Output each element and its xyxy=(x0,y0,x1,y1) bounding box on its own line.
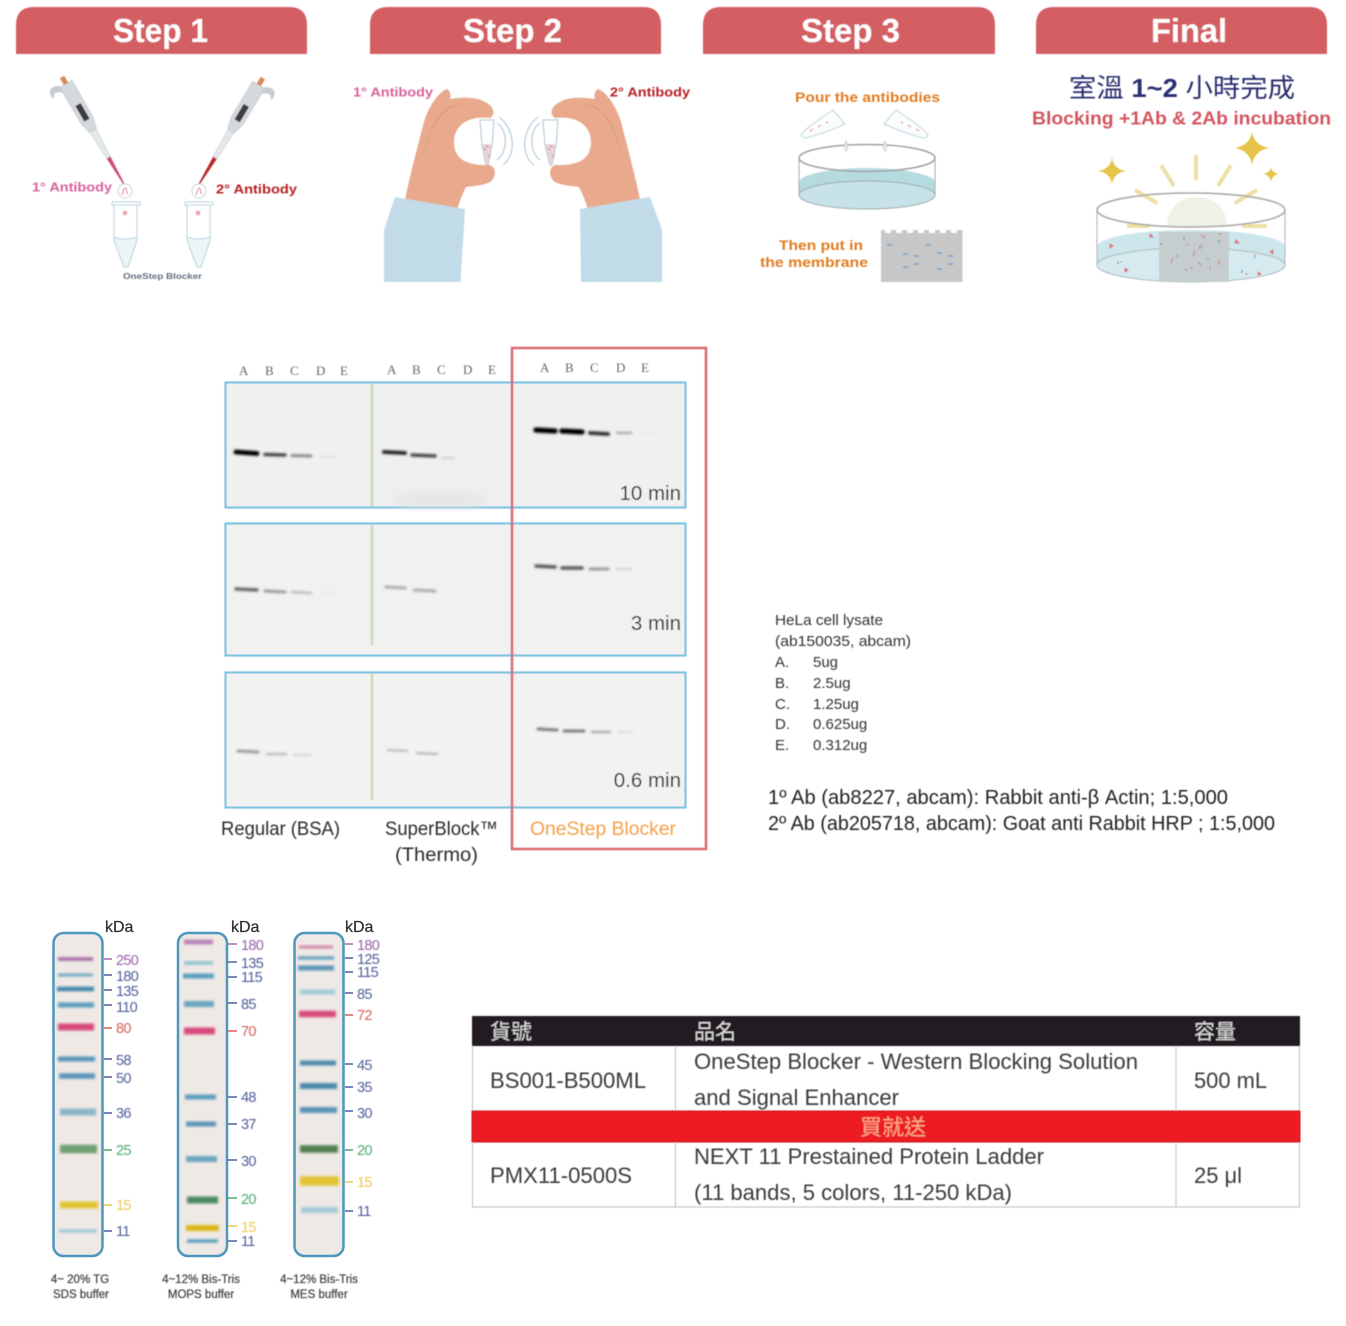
text: HeLa cell lysate samples: 0.625ug xyxy=(813,716,867,733)
table header: 品名 xyxy=(694,1021,736,1044)
icon: left hand xyxy=(384,89,495,282)
label: 1 antibody: 1° Antibody xyxy=(353,84,434,100)
table borders xyxy=(472,1046,1300,1207)
label: 2 antibody: 2° Antibody xyxy=(610,84,691,100)
marker ticks xyxy=(228,944,237,1241)
marker labels: 80 xyxy=(116,1021,131,1037)
panel: western blot comparison xyxy=(221,348,706,866)
marker labels: 180 xyxy=(116,969,139,985)
banner: buy and get free xyxy=(472,1111,1300,1142)
row: OneStep Blocker: and Signal Enhancer xyxy=(694,1085,899,1110)
icon: right hand xyxy=(550,89,662,282)
label: then put in the membrane: Then put in xyxy=(779,238,863,253)
table header: 容量 xyxy=(1194,1021,1236,1044)
table: product ordering xyxy=(472,1016,1300,1207)
lane letters: D xyxy=(616,360,625,375)
text: HeLa cell lysate samples: (ab150035, abcam) xyxy=(775,633,911,650)
marker ticks xyxy=(104,959,112,1231)
label: 3 min: 3 min xyxy=(631,612,681,635)
label: then put in the membrane xyxy=(760,238,869,270)
marker labels: 58 xyxy=(116,1053,131,1069)
text: HeLa cell lysate samples: B. xyxy=(775,675,789,692)
table header xyxy=(472,1016,1300,1046)
marker labels: 110 xyxy=(116,1000,138,1016)
marker labels: 115 xyxy=(357,965,379,981)
label: then put in the membrane: the membrane xyxy=(760,255,869,270)
ladder: 4-20% TG SDS buffer xyxy=(51,919,139,1301)
gel lane xyxy=(54,933,102,1256)
lane letters: C xyxy=(590,360,599,375)
caption xyxy=(162,1274,240,1301)
table header: 貨號 xyxy=(490,1021,532,1044)
label: SuperBlock Thermo: (Thermo) xyxy=(395,844,478,866)
panel: protein ladders xyxy=(51,919,380,1301)
lane letters: A xyxy=(239,363,249,378)
marker labels: 15 xyxy=(241,1220,256,1236)
lane letters: C xyxy=(290,363,299,378)
caption: 4~ 20% TG xyxy=(51,1274,109,1286)
marker labels: 85 xyxy=(357,987,372,1003)
icon: final dish with membrane xyxy=(1097,193,1285,282)
icon: petri dish with solution xyxy=(799,141,935,209)
marker labels: 37 xyxy=(241,1117,256,1133)
marker labels: 72 xyxy=(357,1008,372,1024)
marker labels: 250 xyxy=(116,953,139,969)
lane letters: E xyxy=(488,362,496,377)
row: NEXT 11 ladder: 25 μl xyxy=(1194,1163,1242,1188)
icon: shaken tubes xyxy=(480,117,558,165)
text: HeLa cell lysate samples: 2.5ug xyxy=(813,675,851,692)
heading: step 1 xyxy=(16,7,307,54)
label: 10 min: 10 min xyxy=(619,482,681,505)
caption: 4~12% Bis-Tris xyxy=(162,1274,240,1286)
bands xyxy=(183,942,219,1241)
text: HeLa cell lysate samples: E. xyxy=(775,737,789,754)
heading: step 2: Step 2 xyxy=(463,12,562,49)
marker labels: 30 xyxy=(241,1154,256,1170)
marker labels: 180 xyxy=(241,938,264,954)
unit kDa: kDa xyxy=(231,919,260,936)
bands xyxy=(298,947,339,1210)
heading: step 1: Step 1 xyxy=(113,12,208,49)
marker labels: 135 xyxy=(116,984,139,1000)
unit kDa: kDa xyxy=(345,919,374,936)
lane letters: B xyxy=(565,360,574,375)
text: HeLa cell lysate samples: 0.312ug xyxy=(813,737,867,754)
highlight frame: OneStep Blocker xyxy=(512,348,706,849)
icon: right pipette xyxy=(192,74,279,196)
label: OneStep Blocker: OneStep Blocker xyxy=(123,271,203,281)
lane letters: B xyxy=(265,363,274,378)
text: HeLa cell lysate samples: 5ug xyxy=(813,654,838,671)
label: SuperBlock Thermo: SuperBlock™ xyxy=(385,818,498,840)
caption: 4~12% Bis-Tris xyxy=(280,1274,358,1286)
panel: step 1 xyxy=(16,7,307,281)
caption: MES buffer xyxy=(290,1289,348,1301)
marker labels xyxy=(116,953,139,1240)
icon: pouring tubes xyxy=(801,110,928,138)
marker labels: 20 xyxy=(357,1143,372,1159)
unit kDa: kDa xyxy=(105,919,134,936)
marker labels xyxy=(241,938,264,1250)
icon: right tube xyxy=(185,202,213,267)
marker labels: 36 xyxy=(116,1106,131,1122)
icon: left pipette xyxy=(45,73,131,196)
label: Regular (BSA): Regular (BSA) xyxy=(221,818,340,840)
blot: 3 min xyxy=(226,524,686,656)
marker labels: 11 xyxy=(241,1234,255,1250)
text: HeLa cell lysate samples xyxy=(775,612,911,754)
marker labels: 85 xyxy=(241,997,256,1013)
icon: membrane xyxy=(881,230,962,282)
marker labels: 15 xyxy=(116,1198,131,1214)
heading: step 2 xyxy=(370,7,661,54)
gel lane xyxy=(178,933,227,1256)
label: 0.6 min: 0.6 min xyxy=(614,769,681,792)
row: NEXT 11 ladder xyxy=(490,1144,1242,1205)
heading: step 3: Step 3 xyxy=(801,12,900,49)
label: OneStep Blocker: OneStep Blocker xyxy=(530,818,676,840)
marker labels: 35 xyxy=(357,1080,372,1096)
marker labels: 15 xyxy=(357,1175,372,1191)
marker labels: 135 xyxy=(241,956,264,972)
lane letters: D xyxy=(316,363,325,378)
icon: left tube xyxy=(112,202,140,267)
text: HeLa cell lysate samples: HeLa cell lysate xyxy=(775,612,883,629)
lane letters: C xyxy=(437,362,446,377)
lane letters: E xyxy=(340,363,348,378)
marker labels: 11 xyxy=(357,1204,371,1220)
row: OneStep Blocker: OneStep Blocker - Western Blocking Solution xyxy=(694,1049,1138,1074)
text: room temperature completion time: 室溫 1~2 小時完成 xyxy=(1069,73,1295,103)
panel: final xyxy=(1032,7,1331,282)
lane letters: D xyxy=(463,362,472,377)
blot: 10 min xyxy=(226,382,686,508)
marker labels: 45 xyxy=(357,1058,372,1074)
row: OneStep Blocker: 500 mL xyxy=(1194,1068,1267,1093)
marker labels: 48 xyxy=(241,1090,256,1106)
heading: final xyxy=(1036,7,1327,54)
marker labels: 11 xyxy=(116,1224,130,1240)
label: 2 antibody: 2° Antibody xyxy=(216,182,298,196)
ladder: 4-12% Bis-Tris MES buffer xyxy=(280,919,380,1301)
banner: buy and get free: 買就送 xyxy=(860,1115,926,1140)
caption: MOPS buffer xyxy=(168,1289,234,1301)
row: NEXT 11 ladder: PMX11-0500S xyxy=(490,1163,632,1188)
marker labels: 115 xyxy=(241,970,263,986)
text: antibody conditions: 2º Ab (ab205718, abcam): Goat anti Rabbit HRP ; 1:5,000 xyxy=(768,813,1275,835)
text: blocking and incubation: Blocking +1Ab & 2Ab incubation xyxy=(1032,108,1331,128)
marker labels: 125 xyxy=(357,952,380,968)
marker labels: 30 xyxy=(357,1106,372,1122)
text: HeLa cell lysate samples: A. xyxy=(775,654,789,671)
row: NEXT 11 ladder: (11 bands, 5 colors, 11-250 kDa) xyxy=(694,1180,1012,1205)
icon: droplets xyxy=(118,184,206,198)
heading: final: Final xyxy=(1151,12,1227,49)
marker labels: 70 xyxy=(241,1024,256,1040)
lane letters: B xyxy=(412,362,421,377)
lane letters xyxy=(239,360,649,378)
gel lane xyxy=(294,933,344,1256)
lane letters: A xyxy=(540,360,550,375)
ladder: 4-12% Bis-Tris MOPS buffer xyxy=(162,919,264,1301)
text: antibody conditions xyxy=(768,787,1275,835)
marker labels: 50 xyxy=(116,1071,131,1087)
marker ticks xyxy=(345,944,353,1211)
label: pour the antibodies: Pour the antibodies xyxy=(795,90,940,105)
label: SuperBlock Thermo xyxy=(385,818,498,866)
label: 1 antibody: 1° Antibody xyxy=(32,180,113,194)
row: OneStep Blocker: BS001-B500ML xyxy=(490,1068,646,1093)
row: OneStep Blocker xyxy=(490,1049,1267,1110)
text: HeLa cell lysate samples: 1.25ug xyxy=(813,696,859,713)
marker labels: 20 xyxy=(241,1192,256,1208)
heading: step 3 xyxy=(703,7,995,54)
row: NEXT 11 ladder: NEXT 11 Prestained Protein Ladder xyxy=(694,1144,1044,1169)
text: HeLa cell lysate samples: C. xyxy=(775,696,790,713)
marker labels: 25 xyxy=(116,1143,131,1159)
text: antibody conditions: 1º Ab (ab8227, abcam): Rabbit anti-β Actin; 1:5,000 xyxy=(768,787,1228,809)
blot: 0.6 min xyxy=(226,672,686,808)
marker labels: 180 xyxy=(357,938,380,954)
marker labels xyxy=(357,938,380,1220)
icon: rays and sparkles xyxy=(1098,132,1279,226)
lane letters: E xyxy=(641,360,649,375)
caption xyxy=(51,1274,109,1301)
bands xyxy=(57,959,98,1231)
text: HeLa cell lysate samples: D. xyxy=(775,716,790,733)
caption xyxy=(280,1274,358,1301)
lane letters: A xyxy=(387,362,397,377)
caption: SDS buffer xyxy=(53,1289,109,1301)
panel: step 2 xyxy=(353,7,691,282)
panel: step 3 xyxy=(703,7,995,282)
